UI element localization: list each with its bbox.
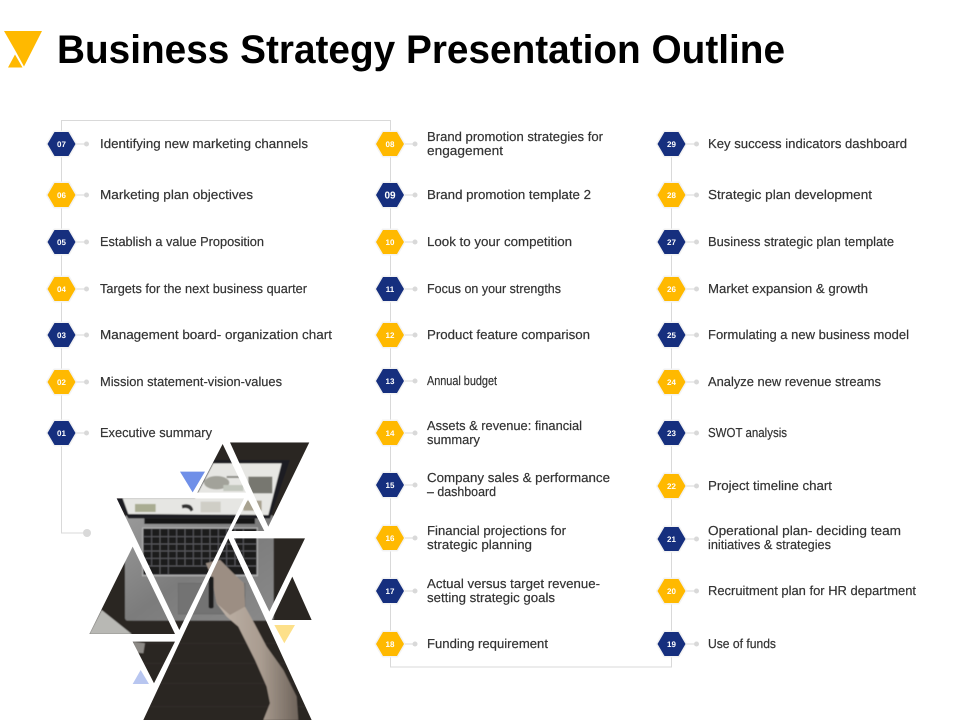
item 22 — [658, 474, 832, 498]
item 25 — [658, 323, 909, 347]
item 16: strategic planning — [427, 537, 532, 552]
title: Business Strategy Presentation Outline — [57, 28, 785, 72]
item 10: Look to your competition — [427, 234, 572, 249]
item 17: 17 — [386, 587, 395, 596]
item 24: 24 — [667, 378, 676, 387]
item 07 — [48, 132, 309, 156]
item 08 — [376, 129, 604, 158]
item 05: 05 — [57, 238, 66, 247]
item 21: 21 — [667, 535, 676, 544]
item 06: Marketing plan objectives — [100, 187, 254, 202]
item 25: 25 — [667, 331, 676, 340]
item 29: 29 — [667, 140, 676, 149]
item 07: 07 — [57, 140, 66, 149]
item 19: 19 — [667, 640, 676, 649]
item 12: 12 — [386, 331, 395, 340]
column 3 items — [658, 132, 916, 656]
item 06 — [48, 183, 254, 207]
item 27: 27 — [667, 238, 676, 247]
item 14: summary — [427, 432, 480, 447]
item 18: Funding requirement — [427, 636, 548, 651]
item 13 — [376, 369, 497, 393]
item 02 — [48, 370, 282, 394]
item 08: Brand promotion strategies for — [427, 129, 604, 144]
item 14 — [376, 418, 582, 447]
item 04 — [48, 277, 308, 301]
item 12 — [376, 323, 590, 347]
item 17: setting strategic goals — [427, 590, 556, 605]
item 07: Identifying new marketing channels — [100, 136, 309, 151]
item 13: Annual budget — [427, 373, 497, 388]
item 01: Executive summary — [100, 425, 212, 440]
item 28 — [658, 183, 872, 207]
item 04: 04 — [57, 285, 66, 294]
item 02: 02 — [57, 378, 66, 387]
item 19: Use of funds — [708, 636, 776, 651]
item 09: 09 — [384, 190, 396, 202]
item 09 — [376, 183, 591, 207]
item 26: Market expansion & growth — [708, 281, 868, 296]
item 17: Actual versus target revenue- — [427, 576, 600, 591]
item 03: 03 — [57, 331, 66, 340]
item 11 — [376, 277, 561, 301]
item 08: engagement — [427, 143, 503, 158]
photo collage — [90, 442, 312, 720]
item 23 — [658, 421, 787, 445]
item 24 — [658, 370, 881, 394]
item 17 — [376, 576, 600, 605]
item 23: 23 — [667, 429, 676, 438]
triangle accent: light blue — [133, 670, 149, 684]
item 11: Focus on your strengths — [427, 281, 561, 296]
item 29 — [658, 132, 907, 156]
item 15: – dashboard — [427, 484, 496, 499]
triangle accent: blue — [180, 472, 205, 492]
item 01: 01 — [57, 429, 66, 438]
item 22: Project timeline chart — [708, 478, 832, 493]
item 29: Key success indicators dashboard — [708, 136, 907, 151]
column 2 items — [376, 129, 610, 656]
item 08: 08 — [386, 140, 395, 149]
item 13: 13 — [386, 377, 395, 386]
column 1 items — [48, 132, 332, 445]
logo — [4, 31, 42, 68]
item 10: 10 — [386, 238, 395, 247]
item 02: Mission statement-vision-values — [100, 374, 282, 389]
item 24: Analyze new revenue streams — [708, 374, 881, 389]
item 16: 16 — [386, 534, 395, 543]
item 15: 15 — [386, 481, 395, 490]
item 21: Operational plan- deciding team — [708, 523, 901, 538]
item 25: Formulating a new business model — [708, 327, 909, 342]
item 28: Strategic plan development — [708, 187, 872, 202]
item 26 — [658, 277, 868, 301]
item 03: Management board- organization chart — [100, 327, 332, 342]
item 14: Assets & revenue: financial — [427, 418, 582, 433]
item 16 — [376, 523, 567, 552]
item 15: Company sales & performance — [427, 470, 610, 485]
item 19 — [658, 632, 776, 656]
item 09: Brand promotion template 2 — [427, 187, 591, 202]
item 05: Establish a value Proposition — [100, 234, 264, 249]
item 11: 11 — [386, 285, 395, 294]
item 27: Business strategic plan template — [708, 234, 894, 249]
item 21: initiatives & strategies — [708, 537, 831, 552]
item 16: Financial projections for — [427, 523, 567, 538]
item 10 — [376, 230, 572, 254]
item 04: Targets for the next business quarter — [100, 281, 308, 296]
item 20 — [658, 579, 916, 603]
item 12: Product feature comparison — [427, 327, 590, 342]
item 05 — [48, 230, 264, 254]
item 28: 28 — [667, 191, 676, 200]
item 14: 14 — [386, 429, 395, 438]
item 22: 22 — [667, 482, 676, 491]
item 20: 20 — [667, 587, 676, 596]
item 20: Recruitment plan for HR department — [708, 583, 916, 598]
item 06: 06 — [57, 191, 66, 200]
item 01 — [48, 421, 212, 445]
item 18: 18 — [386, 640, 395, 649]
item 26: 26 — [667, 285, 676, 294]
item 18 — [376, 632, 548, 656]
item 03 — [48, 323, 332, 347]
item 15 — [376, 470, 610, 499]
item 21 — [658, 523, 901, 552]
item 23: SWOT analysis — [708, 425, 787, 440]
triangle accent: light yellow — [274, 625, 295, 643]
item 27 — [658, 230, 894, 254]
connector path — [62, 120, 672, 667]
